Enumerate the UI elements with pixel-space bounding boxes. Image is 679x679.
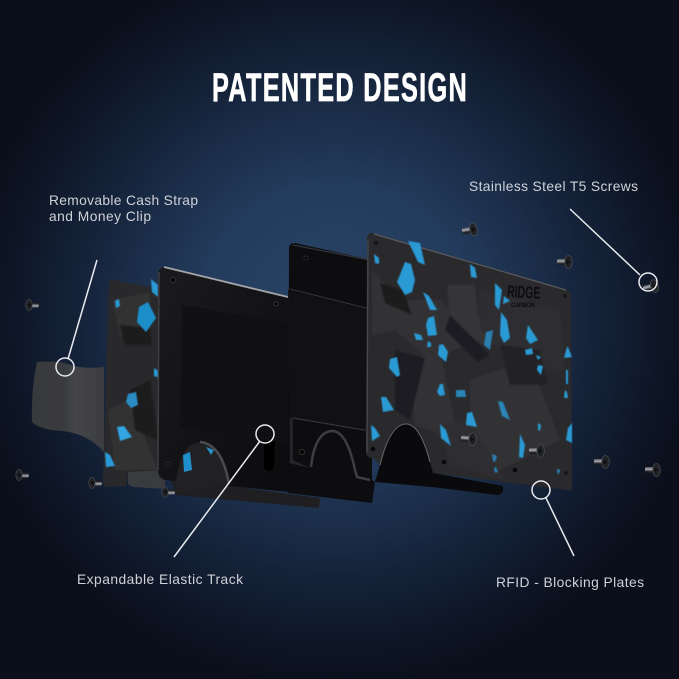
brand mark bbox=[507, 282, 541, 309]
title: PATENTED DESIGN bbox=[212, 66, 467, 111]
back tab bbox=[128, 453, 165, 489]
cash strap clip bbox=[32, 362, 104, 452]
label: RFID plates: RFID - Blocking Plates bbox=[496, 575, 644, 590]
bottom carbon strip bbox=[170, 478, 320, 508]
arch notch bbox=[375, 424, 503, 495]
leader: cash strap bbox=[56, 260, 97, 376]
label: money clip: and Money Clip bbox=[49, 209, 151, 224]
carbon arch tab bbox=[175, 442, 229, 493]
front carbon plate bbox=[366, 233, 572, 495]
second plate with elastic bbox=[158, 267, 290, 493]
leader: screws bbox=[570, 209, 657, 291]
blue flakes bbox=[371, 241, 572, 475]
carbon texture patches bbox=[372, 270, 565, 480]
leader: RFID bbox=[532, 481, 574, 556]
leader: elastic track bbox=[174, 425, 274, 557]
middle plate tabs bbox=[288, 418, 310, 468]
label: cash strap: Removable Cash Strap bbox=[49, 193, 198, 208]
label: elastic track: Expandable Elastic Track bbox=[77, 572, 243, 587]
back carbon plate bbox=[103, 279, 165, 487]
plate screws bbox=[461, 432, 477, 446]
loose screws bbox=[16, 222, 660, 498]
brand mark: CARBON bbox=[511, 303, 535, 309]
brand mark: RIDGE bbox=[507, 282, 541, 303]
label: screws: Stainless Steel T5 Screws bbox=[469, 179, 638, 194]
plate 2 base and middle plate bbox=[288, 243, 375, 503]
elastic track bbox=[180, 305, 288, 442]
